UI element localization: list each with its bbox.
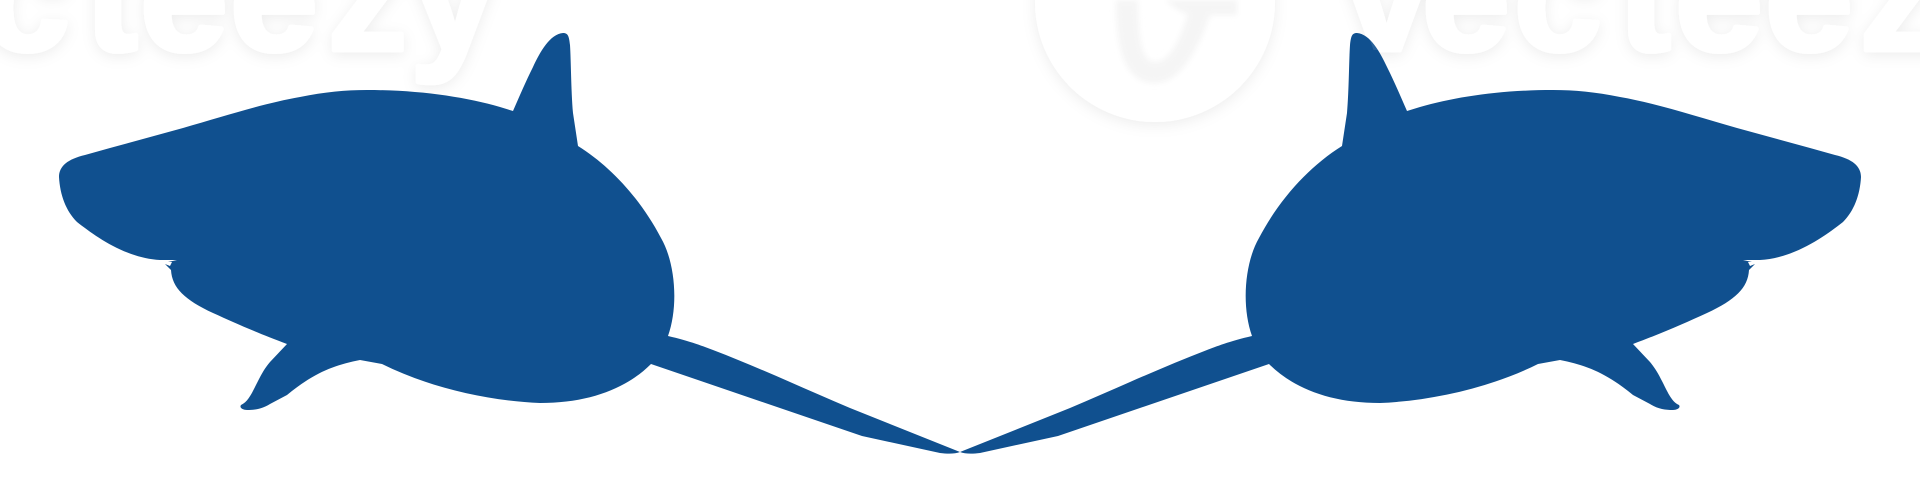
shark: right (mirrored) xyxy=(960,33,1861,454)
shark: left xyxy=(59,33,960,454)
watermark: right word xyxy=(1343,0,1920,84)
watermark: logo disk xyxy=(1035,0,1275,122)
watermark: left word xyxy=(0,0,498,84)
